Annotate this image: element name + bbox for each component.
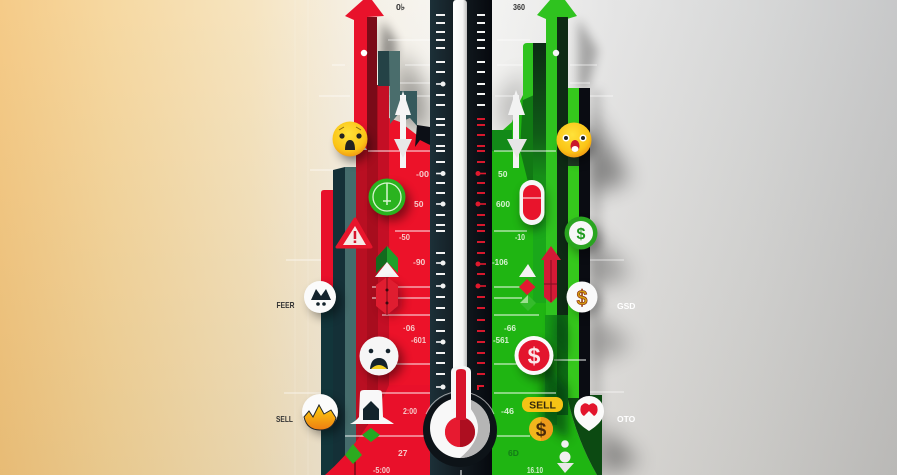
icon: red dollar circle: $ bbox=[528, 343, 541, 369]
scale numbers: 50 bbox=[414, 199, 424, 209]
dark slot bbox=[567, 143, 579, 166]
icon: red diamond bbox=[519, 279, 536, 295]
icon: green diamond bbox=[520, 295, 536, 311]
icon: green dollar circle bbox=[564, 216, 601, 255]
text: FEER label: FEER bbox=[276, 300, 294, 310]
upper column light bbox=[523, 43, 534, 100]
text: GSD label: GSD bbox=[617, 301, 635, 311]
scale numbers: -90 bbox=[413, 257, 426, 267]
scale numbers: 50 bbox=[498, 169, 508, 179]
icon: gold dollar circle: $ bbox=[576, 287, 588, 310]
icon: white triangle bbox=[519, 264, 536, 277]
icon: small white down arrow bbox=[557, 440, 574, 473]
icon: fearful face bbox=[332, 122, 370, 162]
soft shadows on green bbox=[540, 360, 568, 440]
icon: white double arrow right bbox=[507, 90, 527, 168]
icon: red up arrow on green bbox=[541, 246, 561, 303]
cast shadows bbox=[380, 18, 640, 475]
scale numbers: 600 bbox=[496, 199, 510, 209]
text: SELL label left: SELL bbox=[276, 414, 293, 424]
icon: fear triangles circle bbox=[304, 281, 341, 318]
shaded diagonal bbox=[520, 95, 545, 220]
icon: green and white arrow tile bbox=[375, 246, 399, 277]
right white ticks bbox=[477, 15, 485, 105]
right red ticks bbox=[477, 119, 485, 374]
icon: gold dollar coin bbox=[529, 417, 553, 441]
scale numbers: -10 bbox=[515, 232, 525, 242]
dark teal column bbox=[333, 167, 345, 475]
icon: green diamond low bbox=[345, 444, 362, 475]
scale numbers: -00 bbox=[416, 169, 429, 179]
panel: fear red bars bbox=[321, 51, 430, 475]
scale numbers: 6D bbox=[508, 448, 519, 458]
icon: white hat bbox=[350, 390, 394, 424]
scale numbers: -601 bbox=[411, 335, 426, 345]
icon: red dollar circle bbox=[514, 336, 558, 380]
icon: white double arrow left bbox=[394, 91, 412, 168]
thermometer column bbox=[430, 0, 492, 475]
icon: map pin bbox=[574, 396, 604, 431]
scale numbers: -5:00 bbox=[373, 465, 390, 475]
lower dark band bbox=[545, 315, 557, 425]
red zone lower curve bbox=[325, 385, 430, 475]
scale numbers bbox=[373, 2, 543, 475]
scale numbers: -66 bbox=[504, 323, 516, 333]
icon: green dollar circle: $ bbox=[577, 226, 586, 243]
icon: green diamond small bbox=[362, 428, 380, 442]
scale numbers: 2:00 bbox=[403, 406, 417, 416]
right black column bbox=[579, 88, 590, 400]
dark notch bbox=[415, 125, 430, 147]
upper column dark bbox=[533, 43, 546, 303]
panel: greed green bars bbox=[492, 43, 602, 475]
glass tube bbox=[453, 0, 467, 370]
icon: shocked face bbox=[360, 336, 403, 380]
lighter teal column bbox=[345, 167, 356, 475]
dark green upper left block bbox=[492, 130, 512, 151]
lines across red and green panels bbox=[345, 151, 586, 436]
guide lines on background bbox=[284, 0, 624, 475]
right red dots bbox=[476, 171, 486, 390]
scale numbers: -106 bbox=[492, 257, 508, 267]
scale numbers: 27 bbox=[398, 448, 408, 458]
arrow: red up arrow bbox=[345, 0, 384, 150]
icon: gold dollar circle bbox=[566, 282, 601, 317]
icon: surprised face bbox=[556, 122, 594, 162]
icon: SELL badge: SELL bbox=[529, 400, 556, 412]
arrow: green up arrow bbox=[537, 0, 577, 315]
scale numbers: -50 bbox=[399, 232, 410, 242]
upper teal step C bbox=[400, 91, 417, 126]
scale numbers: 360 bbox=[513, 2, 525, 12]
left tick dots bbox=[436, 82, 446, 390]
icon: warning triangle bbox=[337, 219, 371, 247]
upper teal step B bbox=[389, 51, 400, 124]
icon: red hexagon bbox=[376, 277, 402, 318]
scale numbers: -561 bbox=[493, 335, 509, 345]
main crimson body bbox=[367, 85, 378, 475]
icon: gold dollar coin: $ bbox=[536, 420, 547, 441]
right green column bbox=[568, 88, 579, 398]
scale numbers: ·06 bbox=[403, 323, 415, 333]
scale numbers: 0♭ bbox=[396, 2, 405, 12]
thermometer bulb bbox=[423, 366, 497, 475]
icon: flame mountain circle bbox=[302, 394, 343, 435]
upper teal step A bbox=[378, 51, 390, 86]
scale numbers: -46 bbox=[501, 406, 514, 416]
right dark green foot bbox=[568, 395, 602, 475]
base green with curved lower edge bbox=[492, 95, 597, 475]
icon: green clock circle bbox=[368, 178, 410, 221]
icon: red pill bbox=[520, 180, 546, 230]
scale numbers: 16.10 bbox=[527, 465, 543, 475]
dark red column bbox=[356, 150, 367, 475]
left strip, red on top and teal below bbox=[321, 190, 333, 475]
left ticks bbox=[436, 15, 445, 374]
text: OTO label: OTO bbox=[617, 414, 636, 424]
icon: SELL badge bbox=[522, 397, 563, 412]
